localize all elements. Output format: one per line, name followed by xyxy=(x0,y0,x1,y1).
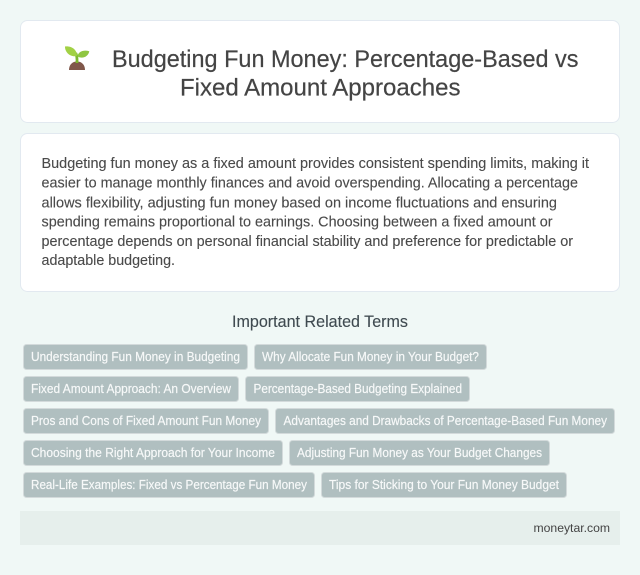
tag: Pros and Cons of Fixed Amount Fun Money xyxy=(31,414,262,428)
tag: Why Allocate Fun Money in Your Budget? xyxy=(262,350,479,364)
panel: title header xyxy=(20,20,620,122)
tag xyxy=(24,344,248,370)
tag xyxy=(276,408,614,434)
text block: summary paragraph: easier to manage monthly finances and avoid overspending. Allocating a percentage xyxy=(42,176,578,192)
text block: summary paragraph xyxy=(42,156,589,269)
text block: summary paragraph: percentage depends on personal financial stability and preference for predictable or xyxy=(42,234,573,250)
panel: summary text xyxy=(20,134,620,292)
title: Budgeting Fun Money: Percentage-Based vs xyxy=(112,46,578,73)
tag xyxy=(246,376,470,402)
tag: Choosing the Right Approach for Your Income xyxy=(31,446,275,460)
title xyxy=(112,46,578,102)
tag xyxy=(24,408,268,434)
text block: summary paragraph: spending remains proportional to earnings. Choosing between a fixed amount or xyxy=(42,214,553,230)
tag xyxy=(290,440,550,466)
panel: related term tags xyxy=(24,344,614,498)
tag: Advantages and Drawbacks of Percentage-Based Fun Money xyxy=(284,414,608,428)
tag: Percentage-Based Budgeting Explained xyxy=(254,382,462,396)
text block: summary paragraph: Budgeting fun money as a fixed amount provides consistent spending limits, making it xyxy=(42,156,589,172)
tag xyxy=(24,376,238,402)
footer source text: moneytar.com xyxy=(534,521,610,535)
tag xyxy=(24,472,314,498)
tag: Understanding Fun Money in Budgeting xyxy=(31,350,240,364)
heading: related terms: Important Related Terms xyxy=(232,313,408,331)
text block: summary paragraph: adaptable budgeting. xyxy=(42,253,175,269)
tag: Fixed Amount Approach: An Overview xyxy=(31,382,232,396)
text block: summary paragraph: allows flexibility, adjusting fun money based on income fluctuations and ensuring xyxy=(42,196,557,212)
footer xyxy=(20,511,620,545)
title: Fixed Amount Approaches xyxy=(180,74,460,102)
tag xyxy=(254,344,486,370)
tag: Adjusting Fun Money as Your Budget Changes xyxy=(297,446,542,460)
tag: Tips for Sticking to Your Fun Money Budget xyxy=(329,478,559,492)
tag xyxy=(322,472,566,498)
tag: Real-Life Examples: Fixed vs Percentage Fun Money xyxy=(31,478,308,492)
icon: sprout xyxy=(65,46,89,70)
tag xyxy=(24,440,282,466)
